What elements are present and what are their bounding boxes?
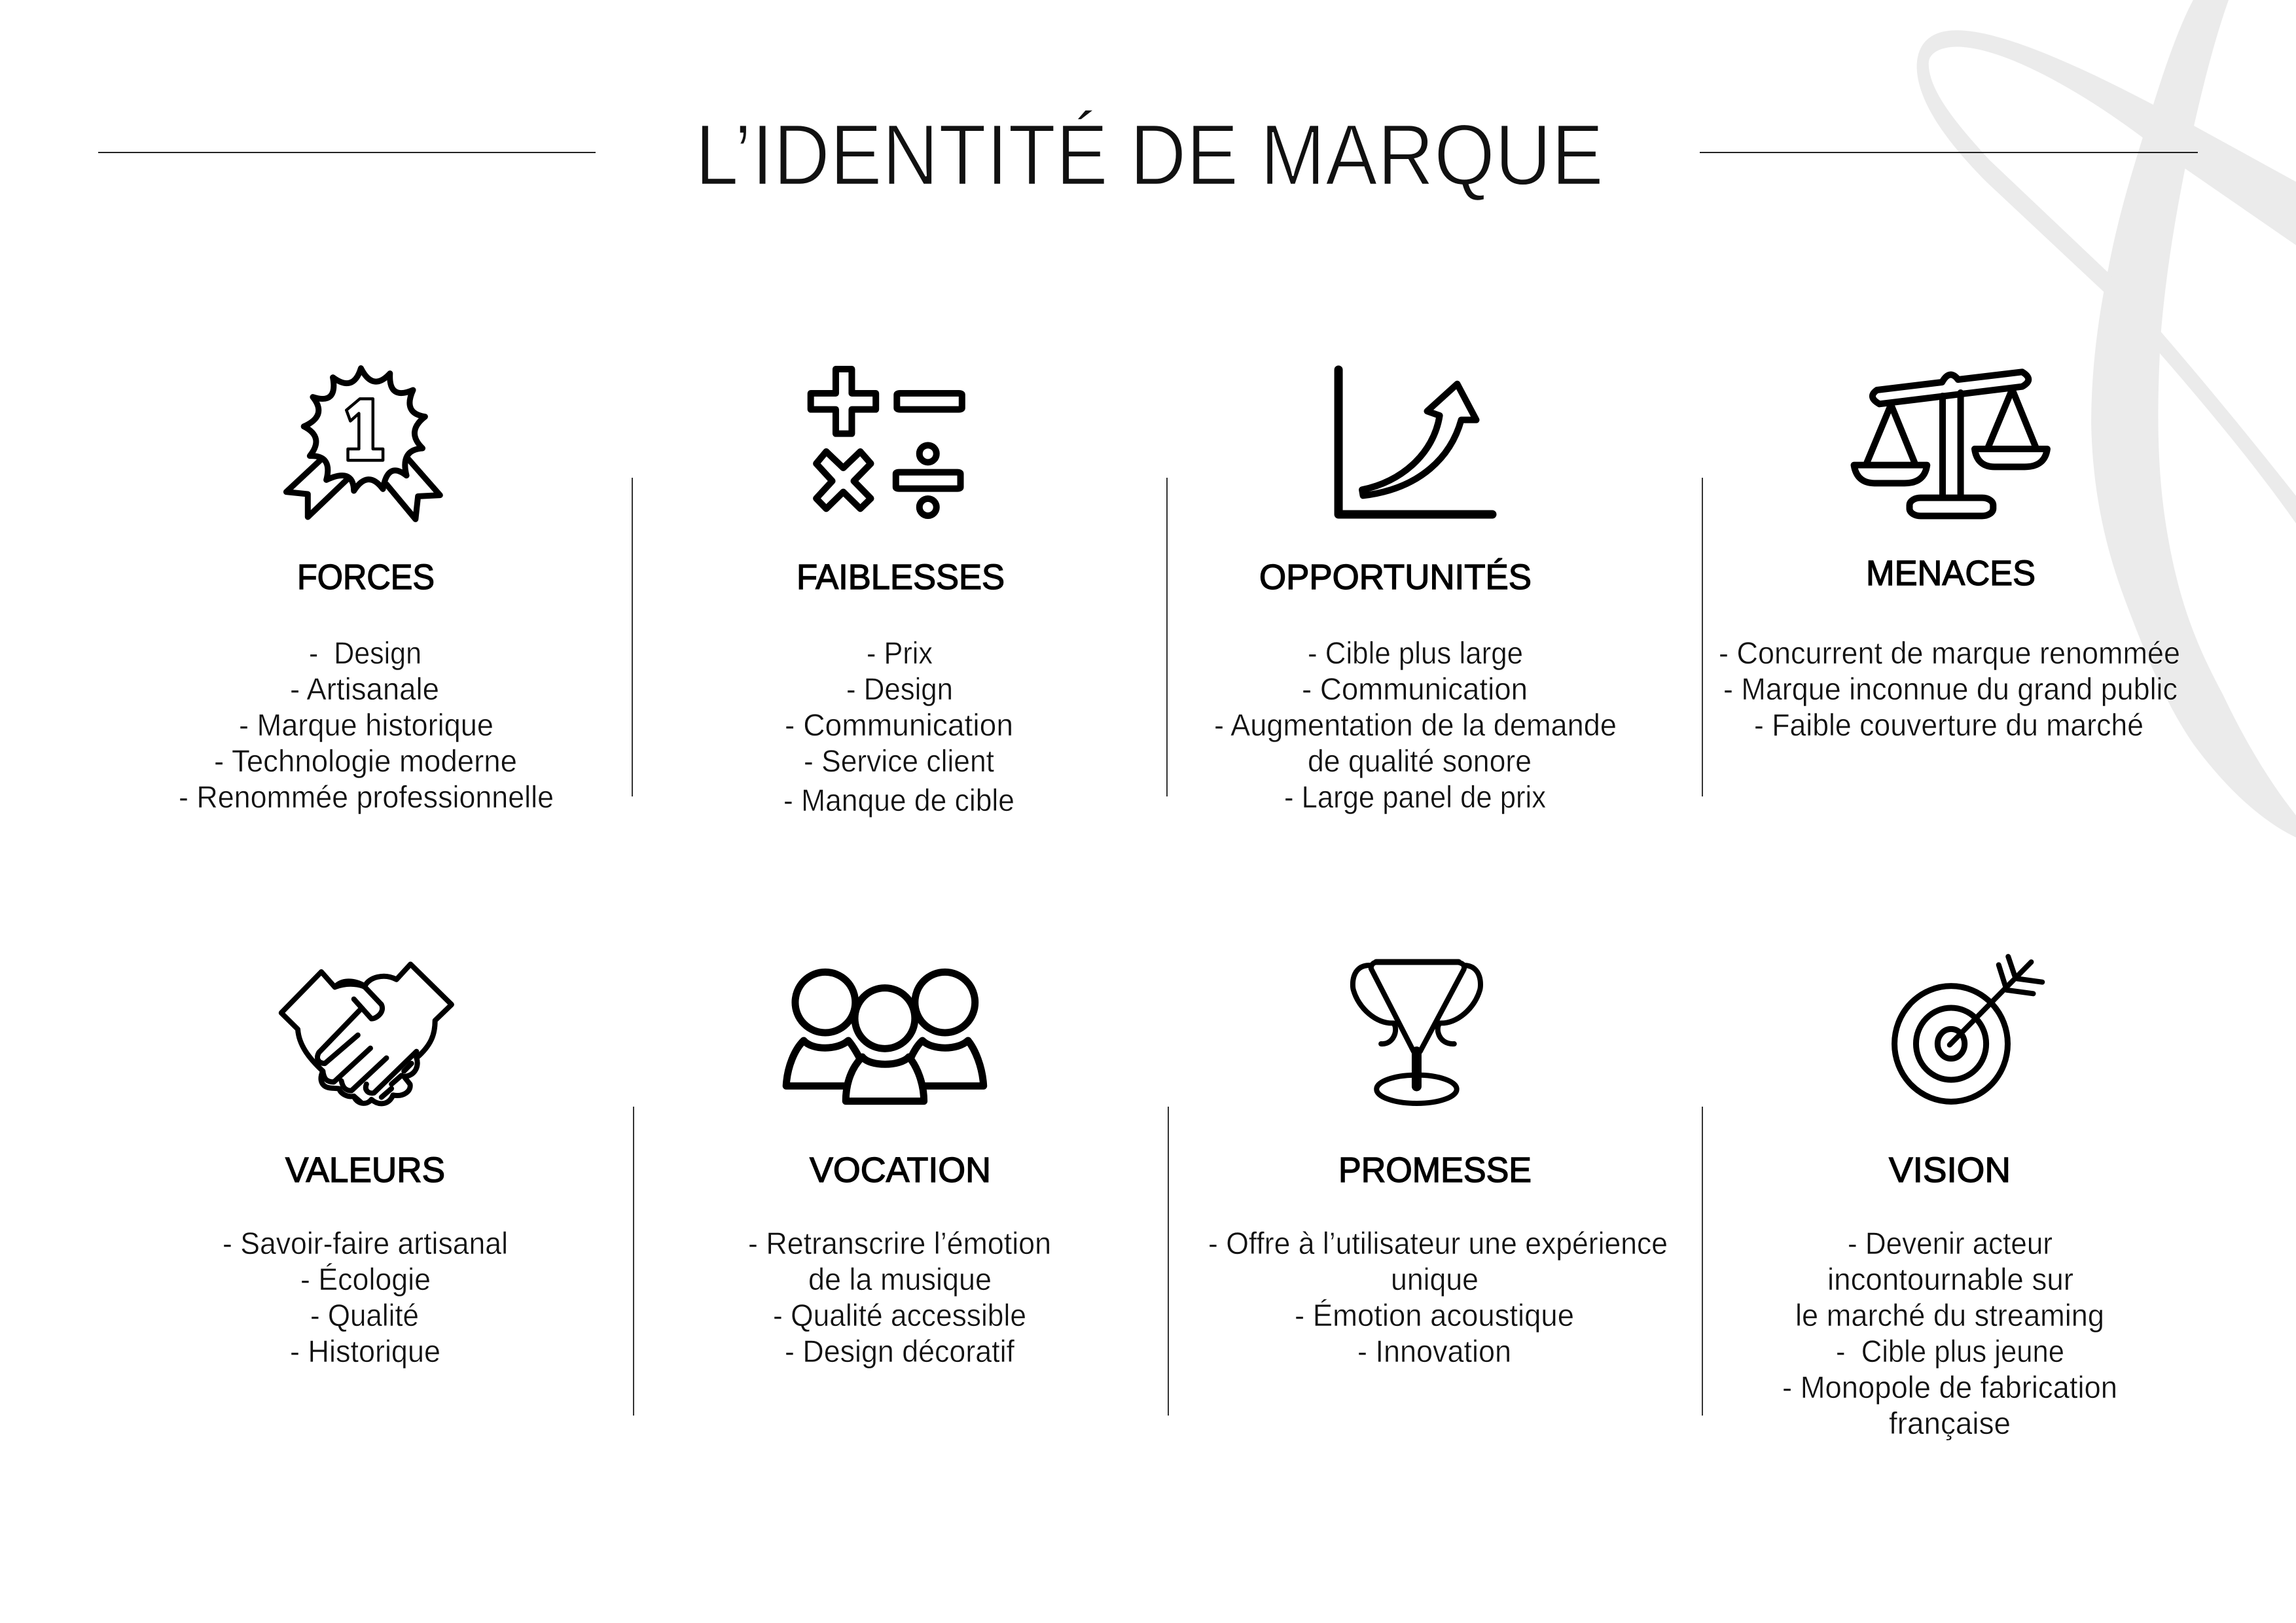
text block: - Savoir-faire artisanal	[223, 1226, 508, 1260]
icon: growth chart	[1338, 370, 1492, 514]
title: L’IDENTITÉ DE MARQUE	[695, 107, 1604, 203]
text block: - Communication	[1302, 671, 1528, 706]
icon: target with arrow	[1895, 957, 2042, 1101]
text block: - Design décoratif	[785, 1334, 1015, 1368]
text block	[223, 1226, 508, 1368]
heading: VALEURS	[285, 1150, 445, 1190]
text block: unique	[1391, 1262, 1479, 1296]
text block	[1214, 635, 1617, 814]
text block	[179, 635, 554, 814]
heading: VOCATION	[810, 1150, 991, 1190]
text block: française	[1889, 1406, 2011, 1440]
text block: - Large panel de prix	[1284, 779, 1546, 814]
text block: - Design	[309, 635, 422, 670]
text block: - Émotion acoustique	[1295, 1298, 1574, 1332]
text block: incontournable sur	[1827, 1262, 2073, 1296]
text block: - Technologie moderne	[214, 743, 517, 778]
text block: - Faible couverture du marché	[1754, 707, 2144, 742]
text block: - Marque inconnue du grand public	[1723, 671, 2178, 706]
panel: valeurs	[223, 964, 508, 1368]
text block: - Devenir acteur	[1848, 1226, 2053, 1260]
panel: menaces	[1719, 372, 2180, 742]
text block: - Qualité accessible	[773, 1298, 1026, 1332]
heading: OPPORTUNITÉS	[1259, 558, 1532, 597]
panel: forces	[179, 368, 554, 814]
icon: handshake	[281, 964, 452, 1103]
text block: - Historique	[290, 1334, 440, 1368]
panel: promesse	[1208, 962, 1668, 1368]
icon: balance scales	[1854, 372, 2047, 516]
panel: faiblesses	[783, 369, 1014, 817]
text block: - Communication	[785, 707, 1013, 742]
text block: de la musique	[808, 1262, 992, 1296]
text block: - Innovation	[1357, 1334, 1511, 1368]
icon: math symbols	[811, 369, 962, 516]
text block	[783, 635, 1014, 817]
text block	[1208, 1226, 1668, 1368]
text block: - Monopole de fabrication	[1782, 1370, 2117, 1404]
text block: - Concurrent de marque renommée	[1719, 635, 2180, 670]
background swirl watermark	[1917, 0, 2296, 838]
text block: - Cible plus large	[1308, 635, 1523, 670]
text block: - Service client	[804, 743, 994, 778]
text block: - Artisanale	[290, 671, 439, 706]
heading: FAIBLESSES	[797, 558, 1005, 597]
heading: PROMESSE	[1338, 1150, 1532, 1190]
text block: - Augmentation de la demande	[1214, 707, 1617, 742]
text block: de qualité sonore	[1308, 743, 1532, 778]
title rule right	[1700, 152, 2198, 153]
text block: - Design	[846, 671, 953, 706]
panel: vision	[1782, 957, 2117, 1440]
text block	[1782, 1226, 2117, 1440]
text block: - Qualité	[310, 1298, 419, 1332]
text block: - Écologie	[300, 1262, 431, 1296]
heading: FORCES	[297, 558, 435, 597]
text block: - Offre à l’utilisateur une expérience	[1208, 1226, 1668, 1260]
title rule left	[98, 152, 596, 153]
text block: - Manque de cible	[783, 783, 1014, 817]
panel: opportunites	[1214, 370, 1617, 814]
text block: - Prix	[867, 635, 933, 670]
text block: - Renommée professionnelle	[179, 779, 554, 814]
panel: vocation	[748, 972, 1051, 1368]
text block	[1719, 635, 2180, 742]
icon: group of people	[786, 972, 984, 1101]
icon: trophy	[1353, 962, 1480, 1103]
column dividers	[632, 478, 1702, 1416]
text block	[748, 1226, 1051, 1368]
text block: - Marque historique	[239, 707, 493, 742]
text block: - Cible plus jeune	[1836, 1334, 2064, 1368]
text block: - Retranscrire l’émotion	[748, 1226, 1051, 1260]
heading: VISION	[1889, 1150, 2011, 1190]
icon: award ribbon	[286, 368, 440, 519]
heading: MENACES	[1866, 554, 2036, 593]
text block: le marché du streaming	[1795, 1298, 2104, 1332]
